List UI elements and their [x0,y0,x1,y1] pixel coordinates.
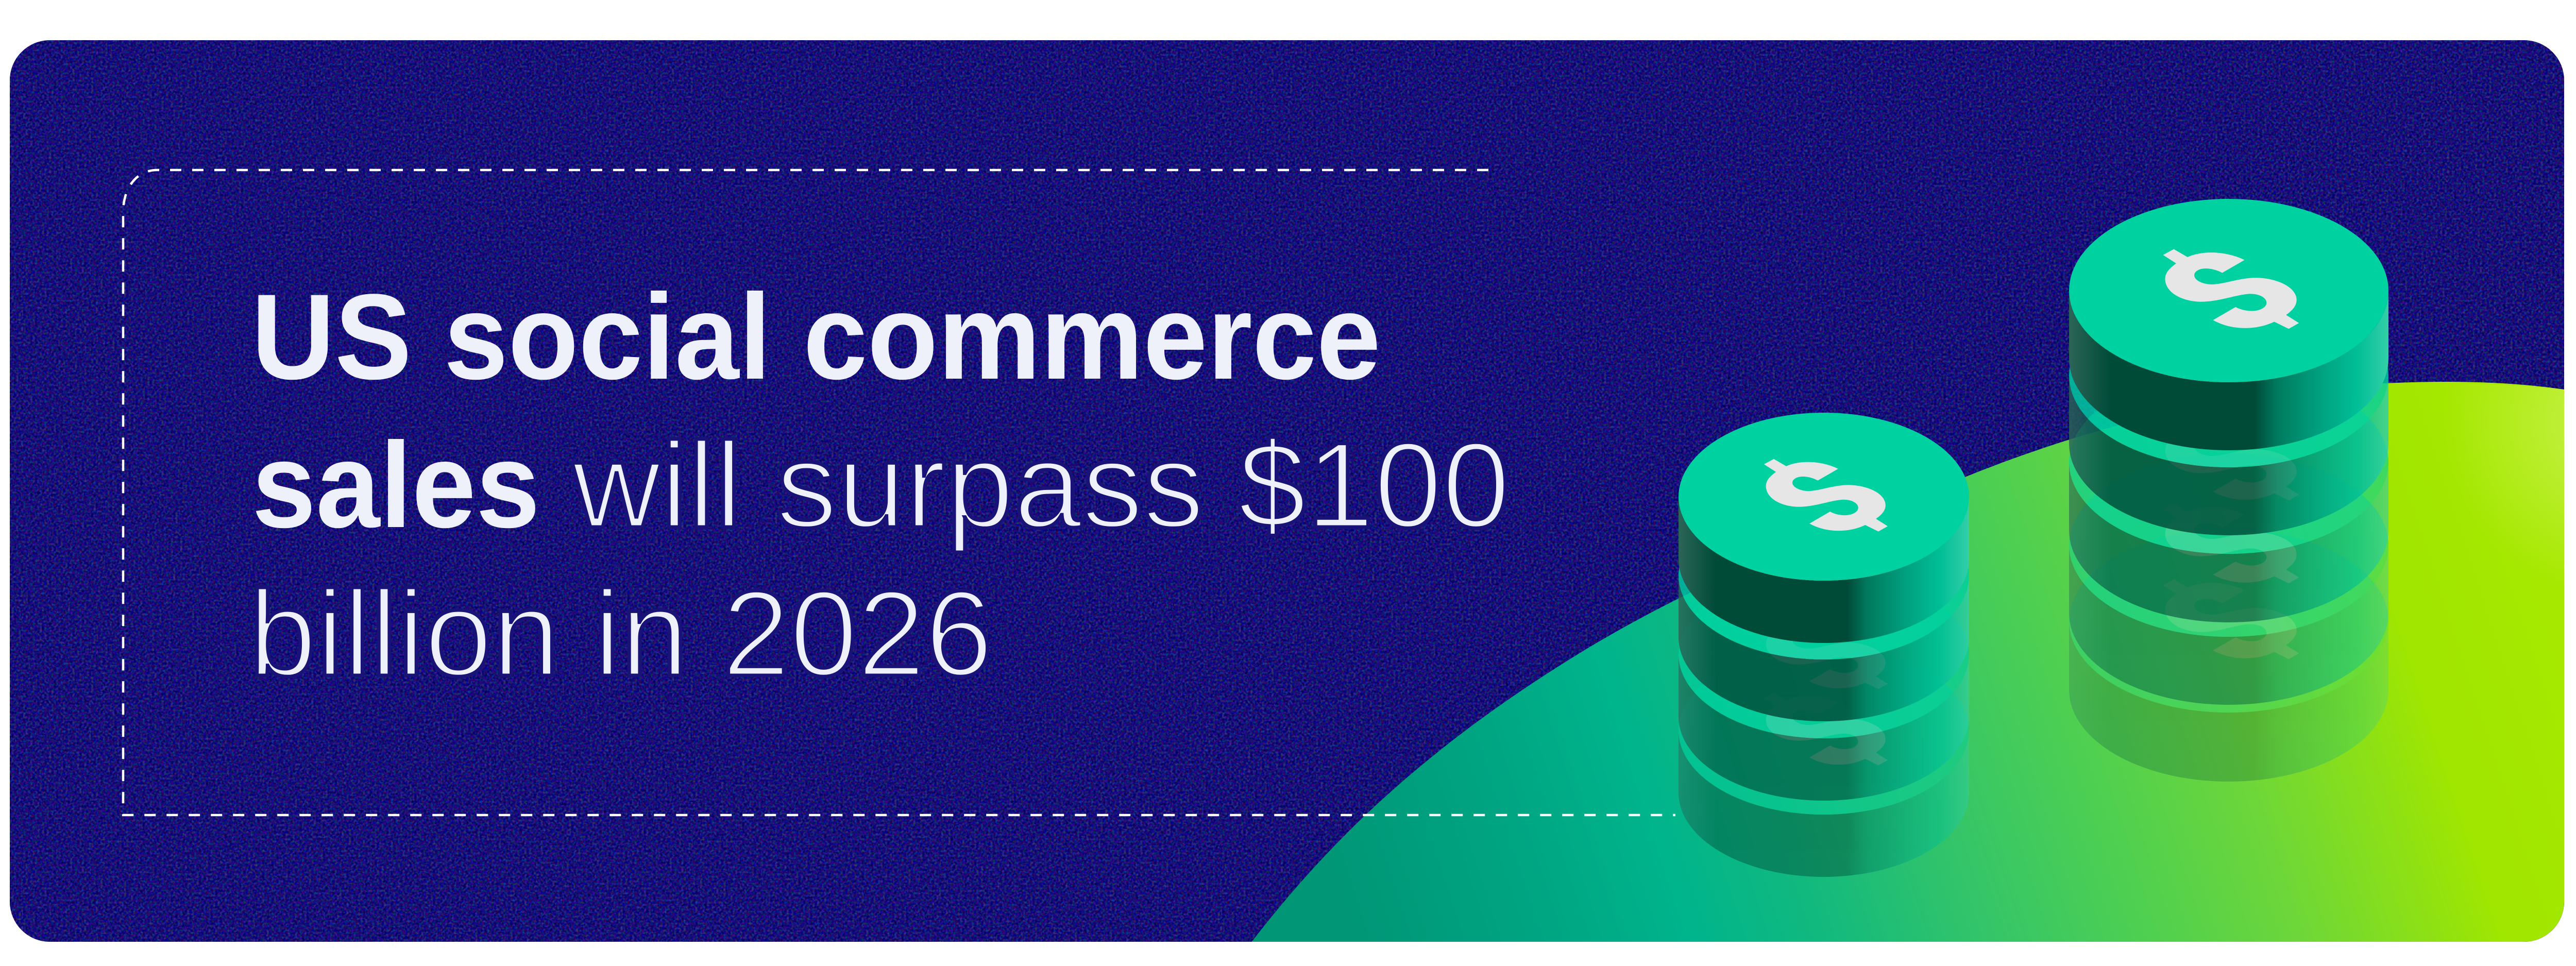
green gradient hill [1251,382,2564,943]
headline text [249,269,1510,702]
headline text: sales [252,417,540,553]
headline text: billion in 2026 [249,566,993,702]
icon: large coin stack [2069,199,2388,782]
dashed frame around headline [123,170,1675,815]
headline text: US social commerce [251,269,1381,405]
headline text: will surpass $100 [572,417,1510,553]
icon: small coin stack [1679,413,1969,877]
